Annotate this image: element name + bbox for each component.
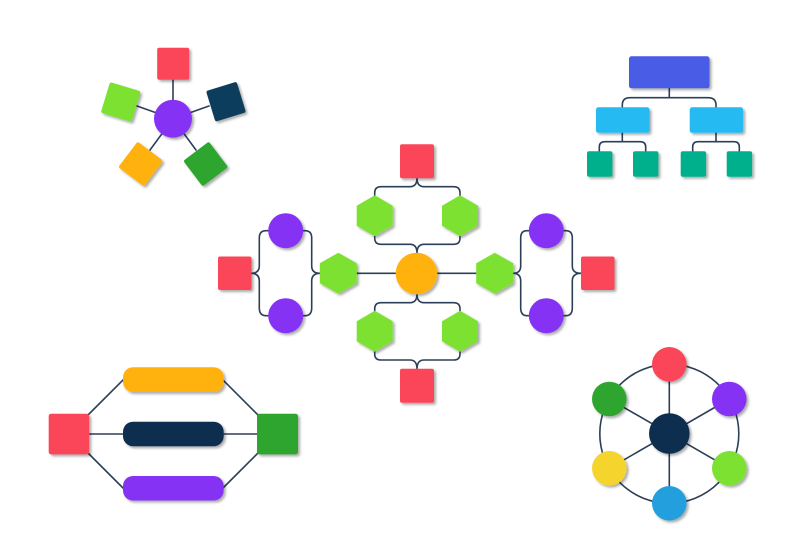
connectors: braces and straight links	[251, 178, 581, 369]
connectors: tree branches	[599, 88, 739, 151]
nodes: root, two branches, four leaves	[587, 56, 752, 177]
panel: hub and ring diagram, bottom right	[592, 347, 747, 521]
connectors: hub to five squares	[137, 78, 209, 150]
panel: parallel paths diagram, bottom left	[49, 367, 298, 500]
connectors: square to pill links	[88, 380, 258, 488]
nodes: two squares and three pills	[49, 367, 298, 500]
connectors: ring and spokes	[600, 364, 739, 503]
panel: radial star diagram, top left	[101, 48, 246, 186]
nodes: hub and six ring circles	[592, 347, 747, 521]
panel: hierarchy tree, top right	[587, 56, 752, 177]
nodes: hub and five rotated squares	[101, 48, 246, 186]
panel: central flow diagram	[218, 144, 614, 403]
nodes: squares, hexagons, circles and centre hub	[218, 144, 614, 403]
